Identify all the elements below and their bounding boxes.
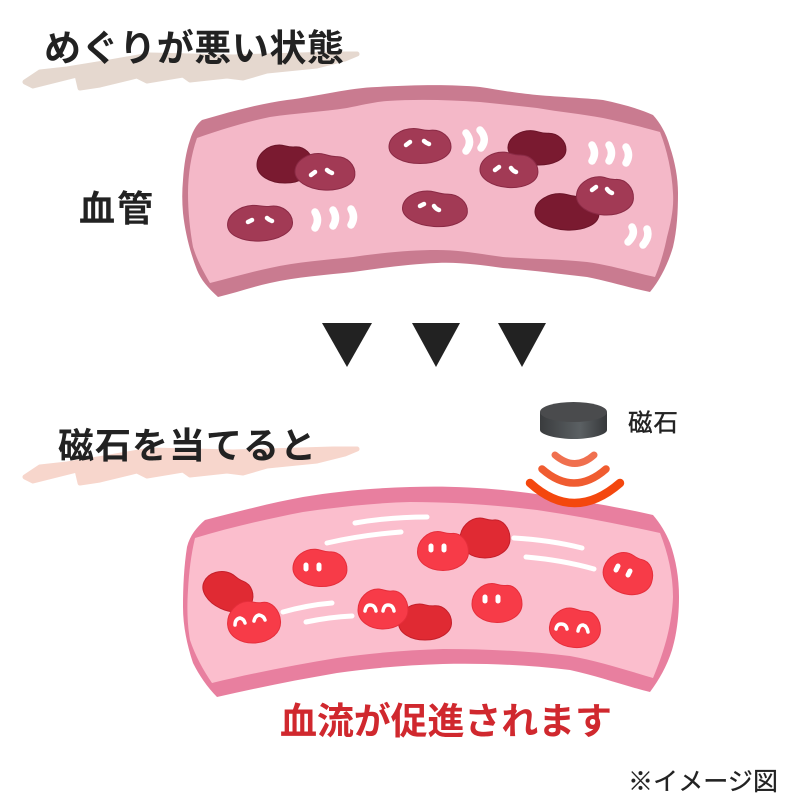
label: blood vessel: 血管 xyxy=(79,188,153,229)
vessel lumen xyxy=(187,502,673,683)
cell cluster c xyxy=(418,518,510,570)
cell g xyxy=(548,606,602,650)
heading: applying a magnet xyxy=(25,425,357,483)
cell b xyxy=(292,548,348,588)
cell 2 xyxy=(389,128,451,164)
vessel wall xyxy=(182,85,678,297)
cell cluster a xyxy=(197,565,282,645)
heading: applying a magnet: 磁石を当てると xyxy=(58,425,316,466)
icon: magnet xyxy=(540,402,607,439)
vessel wall xyxy=(183,487,679,697)
panel: sluggish blood vessel xyxy=(182,85,678,297)
cell cluster 3 xyxy=(479,130,567,189)
cell f xyxy=(472,584,522,622)
cell cluster e xyxy=(358,589,452,640)
heading: poor circulation: めぐりが悪い状態 xyxy=(44,28,344,69)
speed lines xyxy=(283,517,594,622)
label: magnet: 磁石 xyxy=(628,409,678,437)
cell cluster 6 xyxy=(534,176,634,232)
arrows: three downward triangles xyxy=(322,323,546,367)
vessel lumen xyxy=(188,100,673,283)
icon: magnetic waves xyxy=(530,455,620,503)
cell d xyxy=(598,547,658,601)
cell 5 xyxy=(401,189,469,229)
panel: improved blood vessel xyxy=(183,487,679,697)
heading: poor circulation xyxy=(25,28,357,88)
caption: blood flow is promoted: 血流が促進されます xyxy=(280,701,612,742)
note: illustration only: ※イメージ図 xyxy=(628,768,778,796)
motion marks xyxy=(315,130,648,245)
cell cluster 1 xyxy=(257,145,356,192)
cell 4 xyxy=(227,203,293,243)
